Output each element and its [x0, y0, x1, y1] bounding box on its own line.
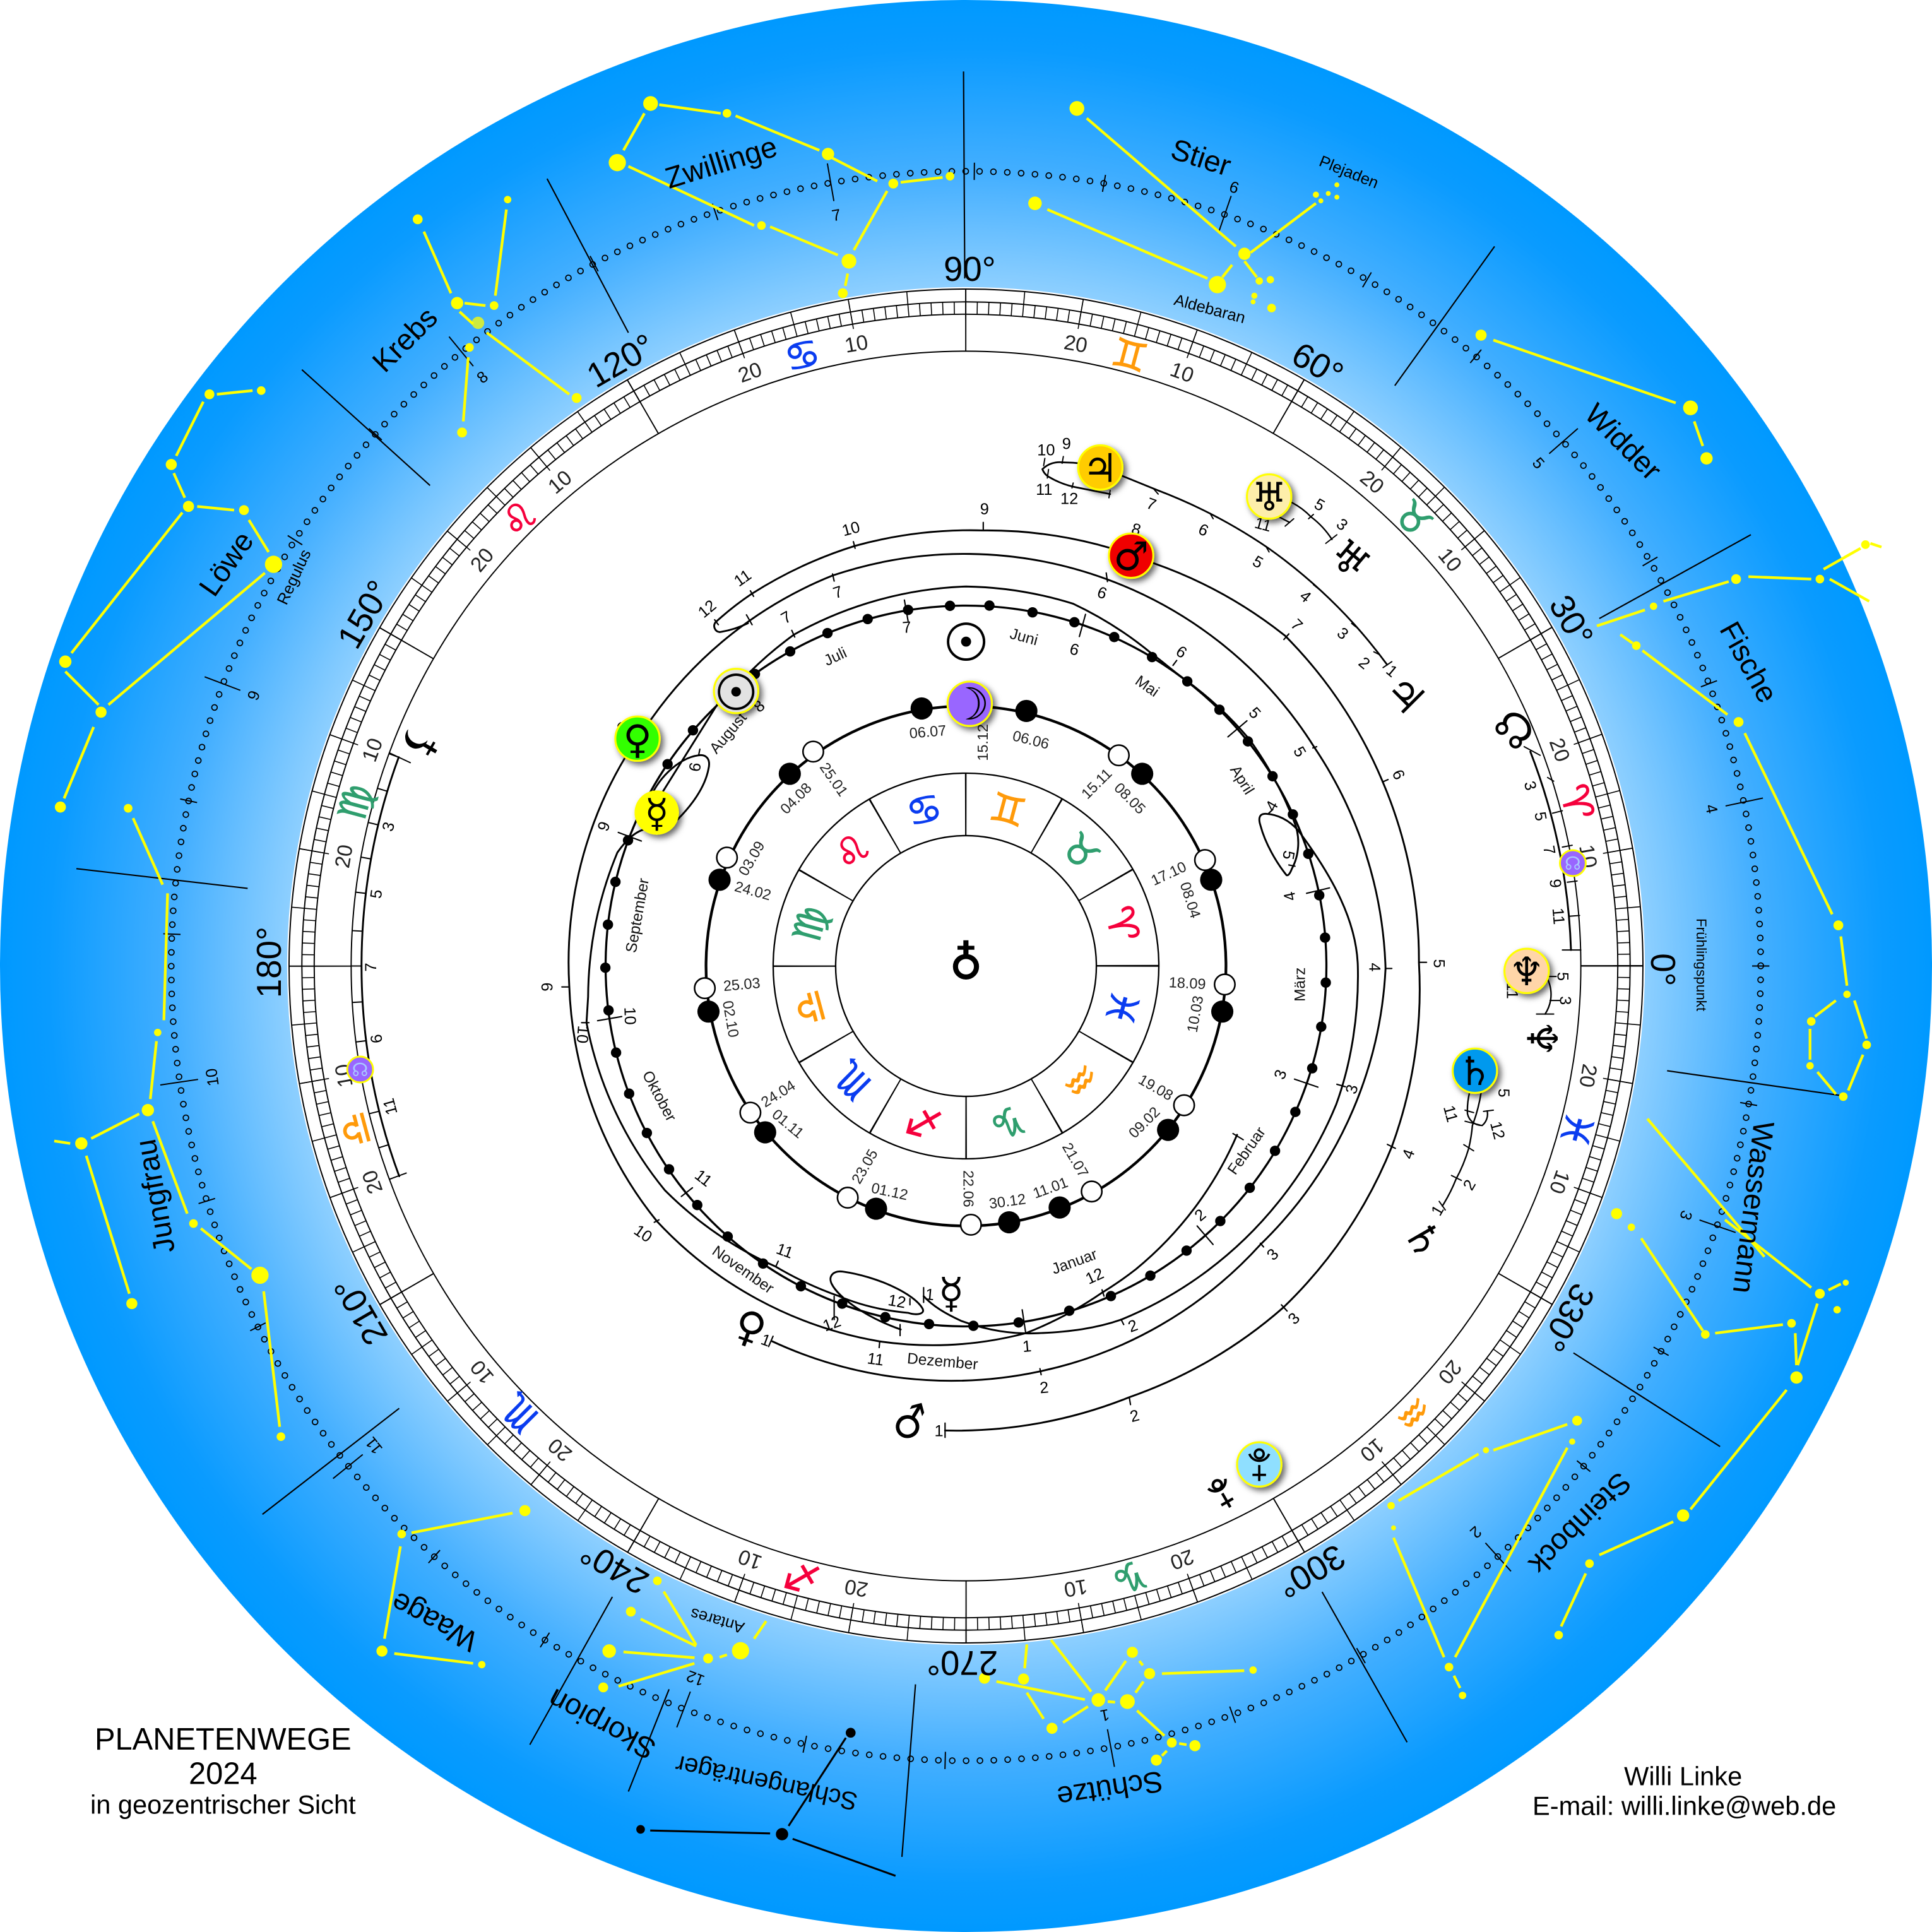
- moon phase dates: 30.12: [988, 1190, 1027, 1212]
- path: Mars: 12: [695, 596, 720, 622]
- sun month numbers: 5: [1245, 704, 1264, 722]
- constellation: Zwillinge: [608, 96, 954, 298]
- moon phase dates: [720, 722, 1206, 1212]
- path: lilith arc left: [351, 753, 410, 1179]
- disc: Neptune: ♆: [1509, 949, 1544, 995]
- moon phase dates: 24.04: [758, 1077, 798, 1110]
- sign degree numbers: 10: [1433, 544, 1466, 577]
- icon: planet symbols beside paths: ⚸: [390, 716, 448, 767]
- sign degree numbers: 10: [331, 1062, 358, 1089]
- icon: planet symbols beside paths: ♃: [1375, 664, 1436, 726]
- path: Saturn: 12: [1486, 1120, 1508, 1141]
- month names: März: [1291, 968, 1308, 1002]
- month names: September: [623, 877, 653, 954]
- ecliptic month numbers: 10: [203, 1067, 223, 1087]
- icon: earth symbol: ♁: [950, 937, 982, 989]
- disc: Venus: ♀: [623, 716, 652, 762]
- moon phase dates: 15.12: [975, 724, 991, 761]
- zodiac glyphs on outer scale: ♉︎: [1384, 490, 1442, 548]
- path: Jupiter: 10: [1037, 441, 1055, 459]
- degree labels: 60°: [1285, 335, 1350, 394]
- central zodiac wheel: ♉︎: [1052, 823, 1109, 880]
- author text: Willi Linke: [1624, 1762, 1742, 1791]
- path: Mercury: [573, 586, 1362, 1336]
- path: Venus: 5: [1289, 744, 1310, 760]
- degree labels: 300°: [1271, 1537, 1352, 1606]
- disc: Jupiter: ♃: [1082, 445, 1118, 491]
- path: Jupiter: 6: [1195, 520, 1211, 540]
- path: Venus: 1: [759, 1330, 773, 1350]
- path: lunar node arc right: 5: [1531, 810, 1550, 822]
- sign degree numbers: 10: [1574, 843, 1601, 870]
- constellation names: Fische: [1714, 616, 1784, 708]
- central zodiac wheel: ♏︎: [823, 1052, 880, 1109]
- central zodiac wheel: [773, 773, 1159, 1159]
- central zodiac wheel: ♒︎: [1052, 1052, 1109, 1109]
- zodiac glyphs on outer scale: ♌︎: [490, 490, 548, 548]
- sun month numbers: 6: [1068, 640, 1081, 660]
- path: Neptune: [1503, 972, 1573, 1014]
- path: Saturn: 2: [1460, 1177, 1479, 1194]
- sign degree numbers: 20: [1544, 735, 1574, 765]
- moon phase dates: 11.01: [1031, 1174, 1070, 1202]
- zodiac glyphs on outer scale: ♈︎: [1550, 779, 1603, 826]
- path: Jupiter: 5: [1250, 552, 1266, 572]
- sun path with weekly dots: [598, 600, 1331, 1333]
- moon phase dates: 25.03: [723, 975, 761, 994]
- path: Mars: 9: [980, 501, 989, 518]
- central zodiac wheel: ♎︎: [783, 985, 837, 1031]
- sign degree numbers: 20: [358, 1167, 388, 1197]
- central zodiac wheel: ♓︎: [1095, 985, 1149, 1031]
- path: Jupiter: 1: [1383, 661, 1401, 681]
- path: lunar node arc right: 11: [1549, 907, 1568, 925]
- path: Jupiter: 9: [1062, 436, 1071, 453]
- moon phase dates: 09.02: [1125, 1103, 1163, 1141]
- icon: planet symbols beside paths: [390, 528, 1567, 1451]
- month names: Mai: [1132, 672, 1162, 701]
- month names: [623, 625, 1308, 1373]
- path: Venus: 2: [1039, 1378, 1050, 1397]
- path: Venus: 3: [1264, 1245, 1283, 1264]
- sun month numbers: 7: [902, 619, 912, 637]
- sun month numbers: 4: [1281, 890, 1300, 903]
- month names: November: [709, 1243, 777, 1297]
- sign degree numbers: 10: [1355, 1433, 1388, 1466]
- path: lilith arc left: 7: [362, 963, 380, 972]
- disc: lunar node left: ☊: [352, 1059, 369, 1081]
- moon phase dates: 01.11: [769, 1106, 807, 1141]
- disc: Sun: ☉: [714, 665, 758, 721]
- sign degree numbers: 10: [735, 1544, 765, 1574]
- zodiac glyphs on outer scale: ♑︎: [1106, 1550, 1153, 1603]
- zodiac glyphs on outer scale: ♏︎: [490, 1384, 548, 1442]
- constellation names: Widder: [1579, 397, 1668, 487]
- moon phase dates: 08.04: [1177, 880, 1204, 920]
- path: Saturn: [1428, 1089, 1512, 1219]
- moon phase dates: 02.10: [720, 999, 742, 1039]
- path: Mars: [695, 501, 1447, 1440]
- path: Uranus: 5: [1311, 495, 1328, 515]
- central zodiac wheel: ♈︎: [1095, 901, 1149, 947]
- central zodiac wheel: ♋︎: [901, 783, 947, 837]
- zodiac glyphs on outer scale: ♎︎: [329, 1106, 382, 1153]
- path: Neptune: 5: [1554, 972, 1572, 981]
- path: Jupiter: 7: [1144, 495, 1158, 514]
- constellation: Schuetze: [979, 1640, 1257, 1765]
- sign degree numbers: 10: [1062, 1574, 1089, 1601]
- ecliptic month numbers: 3: [1676, 1208, 1695, 1223]
- sun month numbers: 9: [595, 819, 614, 834]
- sign degree numbers: 10: [544, 466, 577, 499]
- title text: PLANETENWEGE: [95, 1722, 352, 1757]
- sun month numbers: 12: [821, 1312, 843, 1335]
- path: Saturn: 5: [1495, 1089, 1512, 1098]
- path: Jupiter: 2: [1355, 654, 1373, 673]
- path: lunar node arc right: [1520, 747, 1581, 950]
- moon phase dates: 04.08: [777, 779, 815, 817]
- path: lilith arc left: 5: [367, 889, 386, 899]
- disc: lunar node left: [347, 1057, 373, 1082]
- month names: Januar: [1050, 1246, 1099, 1278]
- star names: Antares: [689, 1604, 747, 1637]
- star names: Plejaden: [1317, 153, 1381, 192]
- ecliptic date ticks: [160, 163, 1769, 1769]
- zodiac glyphs on outer scale: [329, 329, 1603, 1603]
- path: Neptune: 3: [1556, 996, 1573, 1005]
- sign degree numbers: 20: [544, 1433, 577, 1466]
- icon: planet symbols beside paths: ♆: [1517, 1020, 1567, 1057]
- central zodiac wheel: ♍︎: [783, 901, 837, 947]
- degree labels: 120°: [580, 326, 661, 395]
- ecliptic month numbers: 2: [1466, 1522, 1485, 1541]
- icon: planet symbols beside paths: ☿: [939, 1268, 964, 1317]
- moon phase dates: 10.03: [1184, 994, 1206, 1034]
- sun month numbers: 2: [1192, 1206, 1209, 1225]
- path: Mars: 5: [1430, 959, 1447, 968]
- constellation names: Skorpion: [543, 1682, 661, 1766]
- central zodiac wheel: ♑︎: [985, 1095, 1031, 1149]
- icon: planet symbols beside paths: ♄: [1394, 1211, 1455, 1268]
- sign degree numbers: 20: [735, 358, 765, 388]
- month names: Februar: [1224, 1124, 1269, 1178]
- path: Mars: 3: [1284, 1309, 1303, 1328]
- path: Mars: 7: [1287, 615, 1306, 634]
- sign degree numbers: 20: [1062, 331, 1089, 358]
- moon phase dates: 25.01: [817, 759, 851, 799]
- constellation: Schlangentraeger: [636, 1728, 896, 1876]
- central zodiac wheel: ♌︎: [823, 823, 880, 880]
- ecliptic month numbers: 5: [1529, 454, 1548, 473]
- constellation names: Schlangenträger: [673, 1750, 860, 1815]
- moon phase dates: 23.05: [848, 1146, 881, 1187]
- path: Mercury: 9: [685, 761, 704, 773]
- path: Jupiter: 3: [1334, 624, 1352, 643]
- zodiac glyphs on outer scale: ♍︎: [329, 779, 382, 826]
- sun month numbers: 3: [1271, 1067, 1291, 1082]
- path: Venus: 12: [1083, 1265, 1106, 1288]
- path: lilith arc left: 3: [379, 820, 398, 833]
- moon phase dates: 08.05: [1111, 779, 1149, 817]
- ecliptic dotted ring: [171, 171, 1761, 1761]
- constellation names: [129, 130, 1784, 1815]
- moon phase dates: 22.06: [961, 1170, 977, 1207]
- degree labels: 30°: [1541, 589, 1601, 653]
- path: Saturn: 1: [1428, 1202, 1447, 1219]
- title text: in geozentrischer Sicht: [90, 1790, 356, 1820]
- zodiac glyphs on outer scale: ♊︎: [1106, 329, 1153, 382]
- author text: [1532, 1762, 1836, 1821]
- Fruehlingspunkt label: Frühlingspunkt: [1693, 918, 1709, 1012]
- zodiac glyphs on outer scale: ♐︎: [779, 1550, 826, 1603]
- constellation: Waage: [376, 1505, 530, 1668]
- path: Venus: 7: [831, 583, 845, 602]
- degree labels: 180°: [250, 927, 288, 998]
- path: Mars: 2: [1128, 1406, 1141, 1426]
- month names: April: [1226, 762, 1257, 798]
- icon: planet symbols beside paths: ♂: [886, 1394, 935, 1451]
- author text: E-mail: willi.linke@web.de: [1532, 1791, 1836, 1821]
- ecliptic month numbers: 12: [684, 1666, 707, 1690]
- path: Venus: 11: [866, 1349, 885, 1370]
- constellation: Krebs: [413, 196, 581, 437]
- sign degree numbers: 20: [1167, 1544, 1197, 1574]
- path: Jupiter: 12: [1060, 490, 1078, 507]
- sign degree numbers: [331, 331, 1601, 1601]
- sign degree numbers: 10: [843, 331, 870, 358]
- moon phase dates: 06.06: [1011, 727, 1051, 752]
- star names: Aldebaran: [1172, 291, 1247, 327]
- path: Mercury: 6: [1173, 643, 1190, 662]
- month names: Oktober: [639, 1068, 679, 1124]
- degree labels: 0°: [1644, 953, 1682, 986]
- degree labels: 240°: [574, 1533, 655, 1602]
- path: Jupiter: [1036, 436, 1401, 681]
- path: Jupiter: 4: [1296, 587, 1314, 607]
- constellation: Widder: [1476, 329, 1713, 465]
- path: Mercury: 2: [1126, 1317, 1140, 1336]
- month names: Juli: [821, 644, 850, 670]
- constellation: Steinbock: [1387, 1390, 1787, 1699]
- icon: Pluto symbol: [1207, 1476, 1239, 1512]
- sign degree numbers: 20: [466, 544, 499, 577]
- degree labels: 270°: [927, 1644, 998, 1682]
- path: lilith arc left: 11: [380, 1096, 401, 1117]
- icon: planet symbols beside paths: ☊: [1484, 699, 1545, 760]
- degree labels: 150°: [330, 574, 399, 655]
- path: Mercury: 7: [778, 608, 795, 627]
- disc: Venus: [615, 716, 660, 762]
- sun month numbers: 11: [691, 1166, 715, 1190]
- path: Mars: 1: [934, 1422, 944, 1440]
- ecliptic month numbers: 6: [1227, 178, 1241, 198]
- ecliptic month numbers: 11: [362, 1433, 386, 1457]
- constellation names: Jungfrau: [129, 1137, 181, 1256]
- constellation: Fische: [1597, 540, 1882, 1101]
- central zodiac wheel: ♊︎: [985, 783, 1031, 837]
- disc: Mercury: ☿: [644, 790, 669, 836]
- star names: [274, 153, 1381, 1637]
- disc: Moon: ☽: [950, 679, 990, 730]
- disc: Pluto: [1237, 1442, 1281, 1486]
- path: Mars: 8: [1130, 520, 1142, 540]
- path: Venus: 9: [539, 983, 557, 992]
- ecliptic month numbers: 4: [1702, 803, 1721, 815]
- path: Mercury: 3: [1342, 1082, 1362, 1096]
- sign degree numbers: 20: [331, 843, 358, 870]
- degree labels: 330°: [1533, 1277, 1602, 1358]
- constellation names: Wassermann: [1727, 1120, 1781, 1295]
- moon phase dates: 19.08: [1135, 1071, 1176, 1104]
- sign degree numbers: 20: [843, 1574, 870, 1601]
- sign degree numbers: 10: [1167, 358, 1197, 388]
- path: lilith arc left: 6: [367, 1033, 386, 1044]
- ecliptic month numbers: 1: [1099, 1705, 1111, 1724]
- moon phase dates: 17.10: [1149, 858, 1189, 889]
- path: Mercury: 11: [774, 1240, 795, 1262]
- zodiac glyphs on outer scale: ♓︎: [1550, 1106, 1603, 1153]
- moon phase dates: 24.02: [733, 878, 773, 903]
- sign degree numbers: 20: [1355, 466, 1388, 499]
- constellation names: Zwillinge: [661, 130, 781, 195]
- sun month numbers: 10: [620, 1007, 639, 1025]
- moon phase dates: 21.07: [1059, 1140, 1092, 1180]
- constellation: Skorpion: [598, 1577, 766, 1692]
- zodiac glyphs on outer scale: ♋︎: [779, 329, 826, 382]
- constellation names: Krebs: [366, 300, 444, 379]
- title text: 2024: [189, 1757, 258, 1791]
- title text: [90, 1722, 356, 1820]
- sun month numbers: 8: [750, 697, 768, 716]
- constellation: Loewe: [55, 386, 282, 812]
- ecliptic month numbers: 7: [831, 206, 842, 225]
- central zodiac wheel: ♐︎: [901, 1095, 947, 1149]
- disc: Saturn: ♄: [1457, 1048, 1493, 1094]
- ecliptic month numbers: 8: [473, 368, 492, 387]
- zodiac glyphs on outer scale: ♒︎: [1384, 1384, 1442, 1442]
- icon: planet symbols beside paths: ☉: [943, 613, 989, 673]
- sign degree numbers: 10: [466, 1355, 499, 1388]
- month names: Dezember: [906, 1350, 979, 1373]
- degree labels: [250, 250, 1682, 1682]
- path: Mars: 4: [1399, 1147, 1418, 1161]
- constellation names: Waage: [386, 1585, 483, 1658]
- constellation: Wassermann: [1611, 1119, 1849, 1384]
- moon phase dates: 01.12: [870, 1180, 910, 1203]
- path: Mercury: 10: [573, 1025, 592, 1044]
- constellation: Jungfrau: [54, 804, 285, 1441]
- moon phase dates: 03.09: [735, 838, 768, 879]
- sun month numbers: [595, 619, 1300, 1356]
- sign degree numbers: 10: [358, 735, 388, 765]
- icon: planet symbols beside paths: ♅: [1319, 528, 1380, 590]
- degree labels: 210°: [326, 1271, 395, 1352]
- ecliptic month numbers: [203, 178, 1721, 1724]
- path: Uranus: 11: [1253, 514, 1273, 535]
- path: Venus: 4: [1365, 963, 1383, 972]
- constellation names: Schütze: [1055, 1765, 1165, 1814]
- constellation names: Steinbock: [1522, 1466, 1638, 1581]
- constellation: Stier: [1028, 101, 1339, 312]
- outer degree scale ring: [287, 287, 1645, 1645]
- moon phase dates: 06.07: [909, 722, 947, 742]
- path: Saturn: 11: [1440, 1103, 1461, 1124]
- sign degree numbers: 20: [1433, 1355, 1466, 1388]
- path: Mercury: 5: [1279, 849, 1298, 861]
- disc: Mercury: [634, 790, 679, 836]
- path: Venus: 8: [613, 718, 632, 737]
- sign degree numbers: 10: [1544, 1167, 1574, 1197]
- sun month numbers: 1: [1022, 1337, 1032, 1356]
- path: Venus: [539, 554, 1392, 1397]
- path: Jupiter: 11: [1036, 481, 1052, 499]
- path: lunar node arc right: 7: [1539, 845, 1558, 856]
- icon: planet symbols beside paths: ♀: [728, 1299, 773, 1356]
- path: Neptune: 11: [1503, 982, 1521, 999]
- constellation names: Stier: [1167, 133, 1235, 182]
- constellation names: Löwe: [193, 525, 260, 602]
- disc: lunar node right: ☊: [1565, 853, 1581, 874]
- path: Mercury: 4: [1262, 798, 1282, 814]
- disc: Uranus: ♅: [1252, 474, 1287, 520]
- path: Mercury: 12: [887, 1291, 907, 1312]
- moon phase dates: 15.11: [1078, 765, 1115, 802]
- path: Mars: 11: [731, 566, 755, 590]
- month names: Juni: [1008, 625, 1040, 649]
- path: Mars: 10: [840, 518, 862, 540]
- month names: August: [706, 709, 750, 757]
- sign degree numbers: 20: [1574, 1062, 1601, 1089]
- path: Venus: 10: [631, 1221, 655, 1246]
- path: Mercury: 1: [925, 1286, 935, 1304]
- degree labels: 90°: [944, 250, 996, 288]
- path: Mars: 6: [1389, 767, 1408, 783]
- path: lunar node arc right: 9: [1546, 878, 1564, 889]
- path: Venus: 6: [1095, 583, 1109, 603]
- moon ring with phases: [694, 697, 1235, 1235]
- path: lunar node arc right: 3: [1520, 779, 1539, 792]
- path: Uranus: [1253, 495, 1351, 543]
- moon phase dates: 18.09: [1168, 974, 1206, 992]
- disc: Mars: ♂: [1113, 533, 1149, 579]
- star names: Regulus: [274, 547, 315, 607]
- ecliptic month numbers: 9: [244, 688, 264, 703]
- path: Uranus: 3: [1333, 515, 1351, 535]
- disc: lunar node right: [1560, 850, 1585, 876]
